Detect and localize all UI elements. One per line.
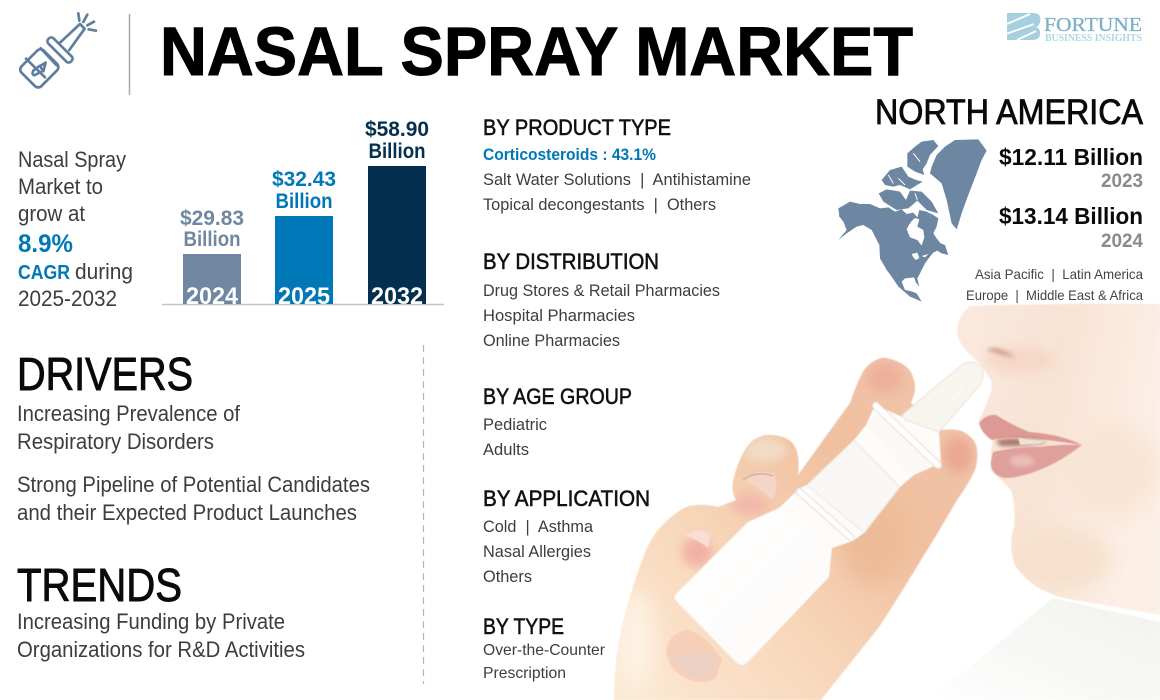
panel: by application: Nasal Allergies [483, 542, 591, 561]
arctic islands south [879, 189, 938, 213]
photo: child using nasal spray [614, 304, 1160, 700]
panel: by type: Prescription [483, 665, 566, 682]
body [674, 508, 832, 665]
finger nails [743, 472, 776, 500]
text block: growth rate: Market to [18, 174, 103, 199]
panel: trends: Organizations for R&D Activities [17, 637, 305, 662]
icon: nasal spray [18, 13, 96, 89]
panel: North America stats: $12.11 Billion [999, 144, 1143, 170]
panel: drivers: Strong Pipeline of Potential Candidates [17, 472, 370, 497]
panel: by product type: Corticosteroids : 43.1% [483, 145, 656, 164]
panel: North America stats: Europe | Middle East & Africa [966, 287, 1143, 303]
logo: Fortune Business Insights: BUSINESS INSIGHTS [1045, 33, 1142, 44]
hudson bay [907, 218, 924, 246]
hand [614, 358, 977, 700]
bar 2024 [180, 207, 244, 310]
panel: by product type: Salt Water Solutions | Antihistamine [483, 170, 751, 189]
bar chart: market size [162, 118, 444, 310]
mainland [838, 202, 948, 302]
panel: trends: Increasing Funding by Private [17, 609, 285, 634]
header divider [128, 14, 130, 95]
shirt [930, 598, 1160, 700]
panel: by age group: BY AGE GROUP [483, 384, 632, 409]
panel: by distribution: Drug Stores & Retail Pharmacies [483, 281, 720, 300]
spray bottle [674, 362, 983, 665]
panel: by product type: Topical decongestants | Others [483, 195, 716, 214]
bar 2025: $32.43 [272, 168, 336, 191]
bar 2032: Billion [368, 140, 426, 163]
dashed divider [422, 345, 424, 684]
panel: North America stats: Asia Pacific | Latin America [975, 266, 1143, 282]
great lakes [912, 253, 928, 260]
bar 2025: 2025 [278, 283, 330, 310]
panel: by application: BY APPLICATION [483, 486, 650, 511]
panel: by age group [483, 384, 632, 459]
nozzle [902, 362, 983, 432]
panel: by distribution [483, 249, 720, 350]
panel: North America stats: NORTH AMERICA [875, 93, 1144, 132]
panel: by application [483, 486, 650, 586]
bar 2024: $29.83 [180, 207, 244, 230]
thumb [666, 630, 722, 682]
logo: Fortune Business Insights: FORTUNE [1044, 14, 1142, 36]
arctic islands north [882, 167, 923, 189]
panel: trends: TRENDS [17, 559, 182, 611]
panel: by distribution: Hospital Pharmacies [483, 306, 635, 325]
greenland [930, 139, 987, 229]
panel: drivers: Respiratory Disorders [17, 429, 214, 454]
face [957, 304, 1160, 615]
bar 2025: Billion [276, 190, 332, 213]
panel: by type [483, 614, 606, 682]
text block: growth rate [18, 147, 133, 311]
bar 2032: 2032 [371, 283, 423, 310]
text block: growth rate: Nasal Spray [18, 147, 126, 172]
bar 2032 [365, 118, 429, 310]
bar 2032: $58.90 [365, 118, 429, 141]
text block: growth rate: 2025-2032 [18, 286, 117, 311]
text block: growth rate: CAGR [18, 262, 70, 284]
panel: by distribution: BY DISTRIBUTION [483, 249, 659, 274]
panel: North America stats: 2023 [1101, 171, 1143, 192]
bar 2024: 2024 [186, 283, 239, 310]
panel: by distribution: Online Pharmacies [483, 331, 620, 350]
panel: by age group: Adults [483, 440, 529, 459]
panel: drivers: DRIVERS [17, 348, 193, 400]
neck ring [796, 488, 854, 541]
title: NASAL SPRAY MARKET [160, 13, 913, 90]
threaded cap [807, 440, 900, 533]
panel: by application: Cold | Asthma [483, 517, 594, 536]
flange [872, 402, 941, 468]
bar 2025 [272, 168, 336, 310]
map: North America [838, 139, 987, 302]
text block: growth rate: during [75, 259, 133, 284]
panel: North America stats: 2024 [1101, 231, 1143, 252]
bottle backing silhouette [779, 405, 941, 548]
logo: Fortune Business Insights [1006, 13, 1142, 44]
panel: by application: Others [483, 567, 532, 586]
panel: by product type [483, 115, 751, 214]
text block: growth rate: 8.9% [18, 230, 73, 258]
panel: by product type: BY PRODUCT TYPE [483, 115, 671, 140]
panel: North America stats [875, 93, 1144, 303]
panel: North America stats: $13.14 Billion [999, 203, 1143, 229]
ellesmere and baffin [907, 140, 938, 175]
panel: drivers [17, 348, 370, 525]
panel: drivers: Increasing Prevalence of [17, 401, 241, 426]
collar [866, 413, 929, 475]
panel: by type: Over-the-Counter [483, 642, 606, 659]
panel: by age group: Pediatric [483, 415, 547, 434]
panel: by type: BY TYPE [483, 614, 564, 639]
panel: trends [17, 559, 305, 662]
text block: growth rate: grow at [18, 201, 85, 226]
panel: drivers: and their Expected Product Launches [17, 500, 357, 525]
bar 2024: Billion [184, 228, 240, 251]
